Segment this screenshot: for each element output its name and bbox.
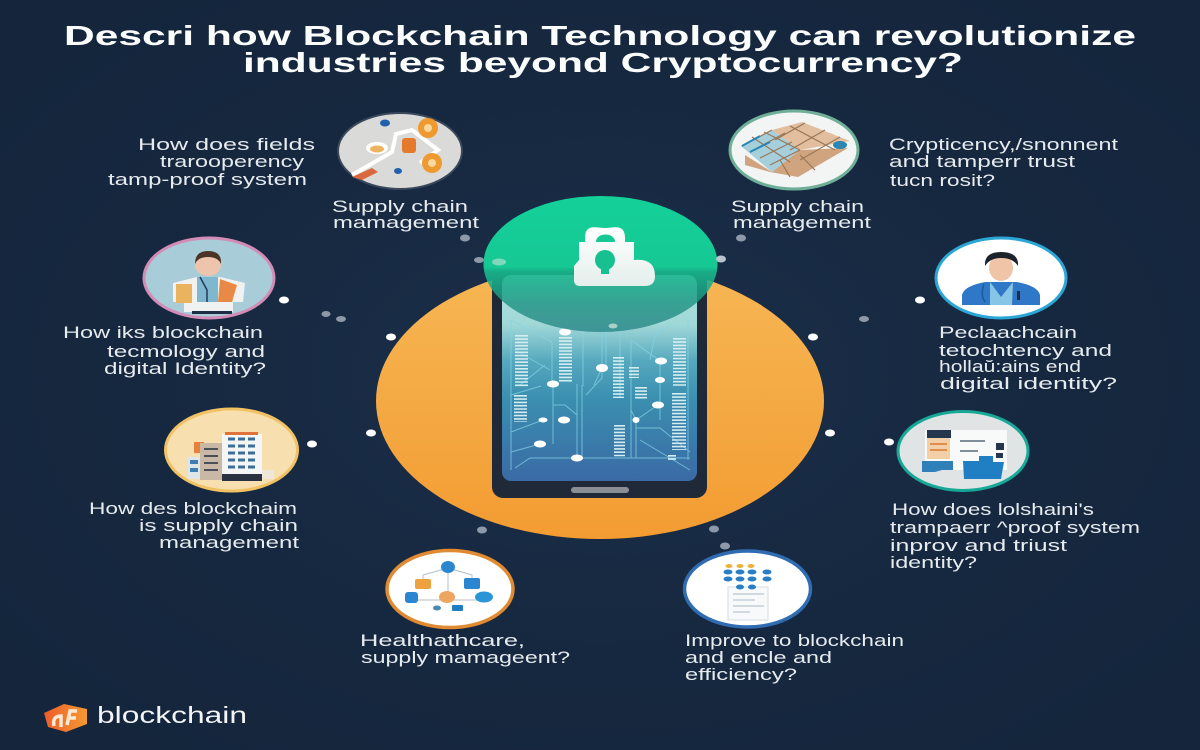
text block: digital Identity? [104,360,266,378]
panel: top left item [108,113,480,232]
text block: How des blockchaim [89,500,297,518]
label [731,198,872,232]
icon: worker [144,238,274,318]
title: Descri how Blockchain Technology can revolutionize [64,20,1136,51]
text block: tecmology and [107,343,265,361]
text block: How does lolshaini's [892,501,1094,519]
text block: management [159,534,300,552]
logo [44,702,247,732]
text block: Improve to blockchain [685,632,904,650]
panel: middle right item [890,412,1140,572]
title [64,20,1136,78]
label [332,198,480,232]
text block: efficiency? [685,666,797,684]
data stripes [520,335,680,461]
circuit nodes [534,328,667,462]
logo wordmark: blockchain [97,702,247,728]
text block [360,632,570,667]
panel: bottom right item [684,551,904,684]
text block: digital identity? [940,375,1117,393]
text block [889,136,1119,190]
text block: Peclaachcain [939,324,1077,342]
label: management [733,214,872,232]
icon: buildings [166,409,298,491]
panel: upper left item [63,238,274,378]
text block: tucn rosit? [890,172,995,190]
phone screen [502,275,697,481]
icon: doctor [936,238,1066,318]
panel: upper right item [936,238,1117,393]
text block: How does fields [138,136,315,154]
panel: top right item [730,111,1119,232]
text block: Healthathcare, [360,632,525,650]
text block: hollaŭ:ains end [939,358,1081,376]
icon: logo hexagon [44,704,87,732]
panel: bottom left item [360,550,570,667]
panel: middle left item [89,409,300,552]
circuit lines [511,320,690,470]
text block [685,632,904,684]
text block: supply mamageent? [361,649,570,667]
label: Supply chain [332,198,468,216]
phone home bar [571,487,629,493]
text block [63,324,266,378]
title: industries beyond Cryptocurrency? [243,47,963,78]
text block: and tamperr trust [889,153,1076,171]
text block: How iks blockchain [63,324,263,342]
text block: Crypticency,/snonnent [889,136,1119,154]
text block: and encle and [685,649,832,667]
text block: is supply chain [139,517,298,535]
central orange circle [376,263,824,539]
icon: supply network [338,113,462,189]
icon: network [387,550,513,628]
text block: tamp-proof system [108,171,307,189]
icon: document with nodes [684,551,810,627]
text block [108,136,315,189]
green lock circle [484,196,718,332]
connector dots [279,234,925,550]
label: mamagement [333,214,480,232]
text block: trarooperency [160,153,305,171]
icon: padlock [574,227,655,286]
text block [939,324,1117,393]
text block: trampaerr ^proof system [890,519,1140,537]
text block [89,500,300,552]
icon: dashboard [898,412,1028,490]
text block: inprov and triust [890,537,1068,555]
phone body [492,266,707,498]
icon: bricks [730,111,858,189]
label: Supply chain [731,198,864,216]
text block: tetochtency and [939,342,1112,360]
text block: identity? [890,554,977,572]
central phone [492,266,707,498]
text block [890,501,1140,572]
